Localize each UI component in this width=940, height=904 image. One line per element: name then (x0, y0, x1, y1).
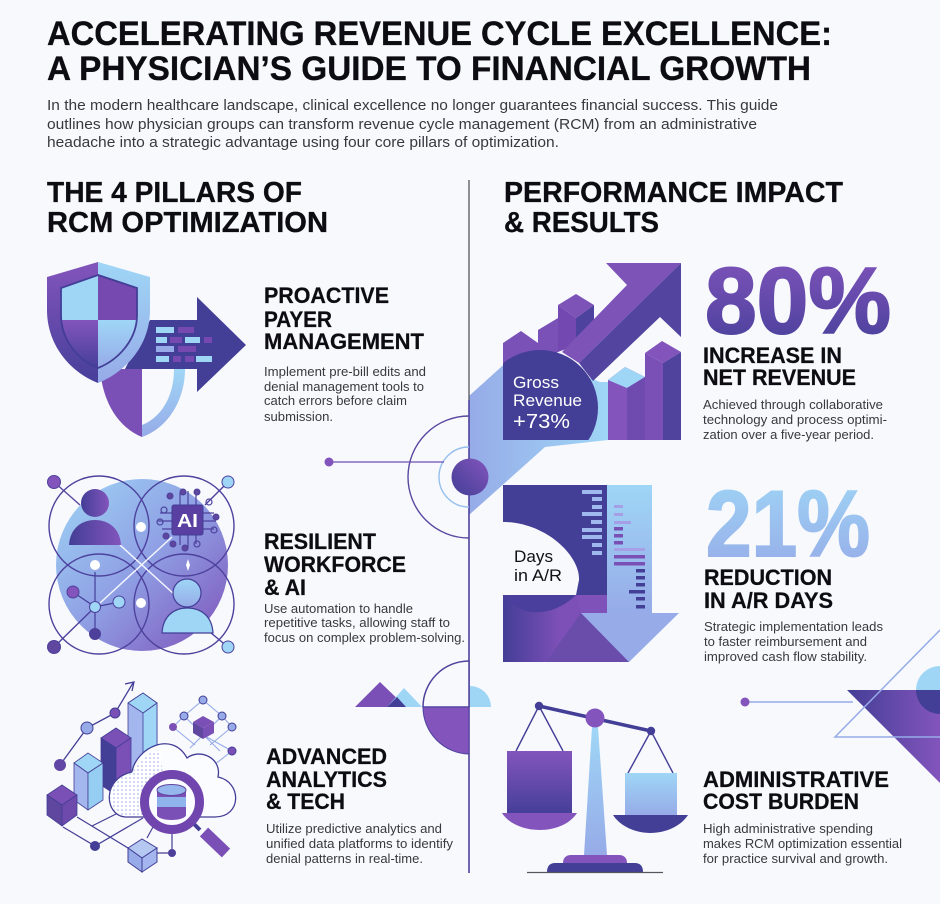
decoration: right triangle and circle (740, 630, 940, 783)
stat: 21 percent: to faster reimbursement and (704, 634, 867, 649)
pillar 1 text: PAYER (264, 307, 332, 332)
pillar 1 text: denial management tools to (264, 379, 424, 394)
stat: administrative cost burden: makes RCM optimization essential (703, 836, 902, 851)
bar cubes (47, 693, 157, 826)
pillar 2 text (264, 529, 465, 645)
pillar 1 text: catch errors before claim (264, 393, 407, 408)
left section heading (47, 177, 328, 239)
decoration: center half circle and mountains (355, 661, 491, 754)
pillar 1 text: Implement pre-bill edits and (264, 364, 426, 379)
person one (69, 489, 121, 545)
pillar 2 text: & AI (264, 575, 306, 600)
pillar 3 text: unified data platforms to identify (266, 836, 454, 851)
stat: administrative cost burden: COST BURDEN (703, 789, 859, 814)
pillar 3 text: & TECH (266, 789, 345, 814)
icon: balance scale (502, 702, 688, 872)
icon: revenue growth chart: +73% (513, 411, 570, 433)
title: A PHYSICIAN’S GUIDE TO FINANCIAL GROWTH (47, 50, 811, 88)
intro text (47, 98, 778, 151)
icon: revenue growth chart: Revenue (513, 391, 582, 410)
icon: days in A/R chart: in A/R (514, 566, 562, 585)
lower cube (128, 839, 157, 872)
small cube (193, 716, 214, 739)
stat: 21 percent: 21% (706, 471, 870, 576)
pillar 2 text: repetitive tasks, allowing staff to (264, 615, 450, 630)
pillar 3 text: Utilize predictive analytics and (266, 821, 442, 836)
network node (67, 572, 125, 640)
stat: 80 percent: technology and process optimi- (703, 412, 887, 427)
stat: 80 percent: zation over a five-year period. (703, 427, 874, 442)
stat: administrative cost burden: for practice survival and growth. (703, 851, 888, 866)
AI chip: AI (177, 511, 198, 531)
right section heading (504, 177, 843, 239)
intro text: outlines how physician groups can transform revenue cycle management (RCM) from an administrative (47, 117, 757, 133)
pillar 1 text: PROACTIVE (264, 283, 389, 308)
network lines (63, 813, 172, 853)
left section heading: RCM OPTIMIZATION (47, 207, 328, 239)
divider with center nodes (324, 180, 488, 873)
pillar 1 text: submission. (264, 409, 333, 424)
icon: revenue growth chart: Gross (513, 373, 559, 392)
icon: shield and arrow (47, 262, 246, 437)
stat: 21 percent: Strategic implementation leads (704, 619, 883, 634)
title (47, 15, 832, 88)
pillar 2 text: WORKFORCE (264, 552, 406, 577)
pillar 2 text: RESILIENT (264, 529, 376, 554)
pillar 2 text: focus on complex problem-solving. (264, 630, 465, 645)
magnifier with database (144, 774, 226, 853)
stat: administrative cost burden (703, 767, 902, 866)
intro text: headache into a strategic advantage using four core pillars of optimization. (47, 135, 559, 151)
stat: 80 percent (703, 248, 891, 442)
intro text: In the modern healthcare landscape, clinical excellence no longer guarantees financial success. This guide (47, 98, 778, 114)
title: ACCELERATING REVENUE CYCLE EXCELLENCE: (47, 15, 832, 53)
stat: 80 percent: 80% (705, 248, 891, 353)
stat: 21 percent (704, 471, 883, 664)
icon: revenue growth chart (469, 263, 681, 515)
pillar 3 text: ANALYTICS (266, 767, 387, 792)
left section heading: THE 4 PILLARS OF (47, 177, 302, 209)
stat: 21 percent: IN A/R DAYS (704, 588, 833, 613)
pillar 2 text: Use automation to handle (264, 601, 413, 616)
pillar 3 text: denial patterns in real-time. (266, 851, 423, 866)
stat: 80 percent: INCREASE IN (703, 343, 842, 368)
stat: 21 percent: improved cash flow stability. (704, 649, 867, 664)
cloud (109, 744, 236, 817)
pillar 1 text (264, 283, 426, 424)
icon: days in A/R chart: Days (514, 547, 553, 566)
icon: days in A/R chart (503, 485, 679, 662)
stat: 80 percent: NET REVENUE (703, 365, 856, 390)
stat: 21 percent: REDUCTION (704, 565, 832, 590)
trend line (54, 682, 134, 771)
stat: administrative cost burden: High administrative spending (703, 821, 873, 836)
AI chip (157, 489, 219, 551)
right section heading: & RESULTS (504, 207, 659, 239)
icon: workforce and AI (48, 476, 234, 654)
right section heading: PERFORMANCE IMPACT (504, 177, 843, 209)
person two (162, 579, 213, 633)
stat: administrative cost burden: ADMINISTRATIVE (703, 767, 889, 792)
pillar 3 text: ADVANCED (266, 744, 387, 769)
stat: 80 percent: Achieved through collaborative (703, 397, 883, 412)
pillar 3 text (266, 744, 454, 866)
pillar 1 text: MANAGEMENT (264, 329, 424, 354)
icon: analytics and cloud (47, 682, 236, 872)
